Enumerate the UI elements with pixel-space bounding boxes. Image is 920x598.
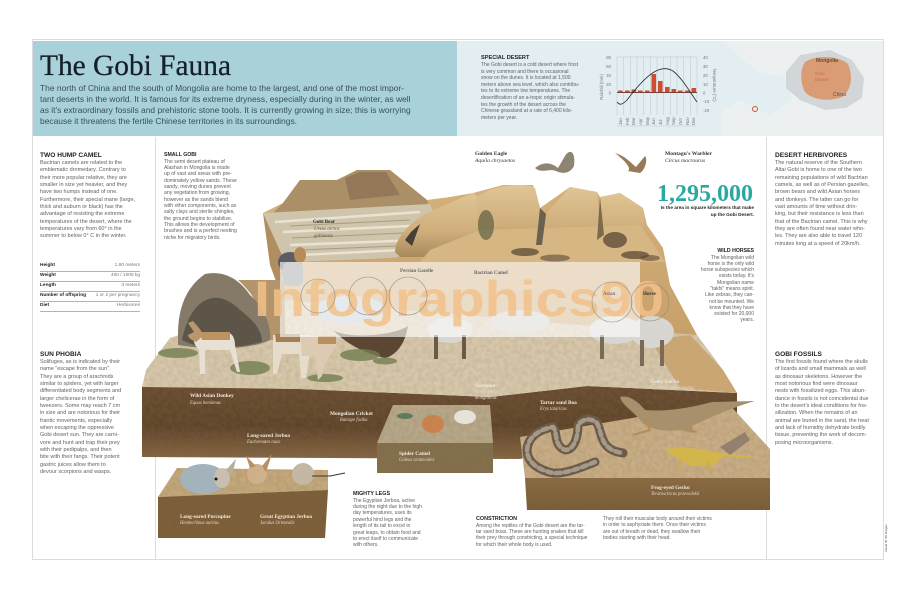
climate chart (599, 55, 717, 126)
body: constriction column 2 (603, 516, 712, 541)
body: sun phobia: with their pedipalps, and then (40, 447, 112, 453)
body: gobi fossils: most notorious find were dinosaur (775, 381, 858, 387)
body: constriction column 1: tar sand boas. These are hunting snakes that kill (476, 529, 583, 535)
intro text: because it threatens the fertile Chinese territories in its surroundings. (40, 116, 297, 126)
vegetation (158, 348, 397, 382)
animal labels (180, 379, 690, 520)
body: mighty legs: day temperatures, uses its (353, 510, 412, 516)
climate chart: Jun (651, 117, 656, 125)
great egyptian jerboa (292, 463, 345, 485)
body: small gobi: the ground begins to stabilize. (164, 216, 232, 222)
body: desert herbivores: camels, as well as of Persian gazelles, (775, 182, 869, 188)
row: height: 1.80 meters (115, 263, 140, 268)
body: wild horses: existed for 20,000 (714, 311, 754, 317)
body: two hump camel (40, 160, 135, 239)
animal labels: Wild Asian Donkey (190, 393, 234, 399)
animal labels: Goby Gecko (651, 379, 679, 385)
special desert heading: SPECIAL DESERT (481, 55, 529, 61)
special desert text: desertification of an a-tropic origin stimula- (481, 95, 575, 101)
heading: sun phobia: SUN PHOBIA (40, 351, 81, 358)
climate chart: Rainfall (mm) (599, 74, 604, 100)
header panel: introduction (33, 41, 457, 136)
climate chart: Nov (685, 117, 690, 125)
body: gobi fossils: of lizards and small mammals as well (775, 366, 866, 372)
body: mighty legs: length of its tail to excel in (353, 523, 410, 529)
row: diet: Herbivores (117, 303, 140, 308)
body: small gobi: up of vast and areas with pre- (164, 171, 232, 177)
montagu's warbler (615, 153, 646, 173)
body: mighty legs: The Egyptian Jerboa, active (353, 498, 415, 504)
body: small gobi: however as the sands blend (164, 197, 228, 203)
diorama illustration: Cyrtopodion elongatus (651, 386, 694, 391)
row: length: Length (40, 283, 56, 288)
climate chart: 20 (606, 82, 612, 87)
body: wild horses (701, 254, 754, 323)
locator map: Gobi (815, 71, 825, 76)
upper labels on the scene: Horse (643, 292, 657, 297)
body: small gobi: brushes and is a perfect nesting (164, 228, 237, 234)
label: montagu's warbler: Circus macrourus (665, 158, 705, 164)
label: golden eagle (474, 151, 515, 164)
body: wild horses: Mongolian name (717, 280, 754, 286)
body: gobi fossils: to the desert's ideal conditions for fos- (775, 403, 867, 409)
body: gobi fossils: animal are buried in the sand, the heat (775, 418, 869, 424)
long-eared jerboa (246, 454, 272, 484)
body: constriction column 1: Among the reptiles of the Gobi desert are the tar- (476, 522, 585, 528)
body: two hump camel: emblematic dromedary. Contrary to (40, 167, 126, 173)
body: two hump camel: temperatures of the desert, where the (40, 219, 132, 225)
body: wild horses: horse is the only wild (708, 261, 754, 267)
locator map (722, 41, 883, 136)
body: sun phobia: in size and are notorious for their (40, 410, 120, 416)
body: constriction column 1: their prey through constricting, a special technique (476, 535, 587, 541)
back rock formations (263, 170, 697, 370)
body: desert herbivores: king, but their resistance is less than (775, 211, 864, 217)
animal labels: Great Egyptian Jerboa (260, 514, 312, 520)
text block: constriction (476, 516, 712, 548)
body: two hump camel: thick and auburn or black) has the (40, 204, 123, 210)
big number: 1,295,000 (657, 181, 753, 207)
body: sun phobia: tweezers. Some may reach 7 cm (40, 403, 120, 409)
heading: small gobi: SMALL GOBI (164, 152, 196, 158)
body: two hump camel: Furthermore, their special mane (large, (40, 197, 135, 203)
diorama illustration: Hemiechinus auritus (179, 521, 219, 526)
body: desert herbivores: The natural reserve of the Southern (775, 160, 862, 166)
upper labels on the scene: Bactrian Camel (474, 271, 508, 276)
body: wild horses: exists today. It's (719, 273, 754, 279)
row: offspring (40, 291, 140, 302)
golden eagle (535, 152, 574, 173)
label: golden eagle: Golden Eagle (475, 151, 507, 157)
rodents block (158, 468, 328, 538)
row: length (40, 281, 140, 292)
heading: desert herbivores: DESERT HERBIVORES (775, 152, 847, 159)
text block: wild horses (701, 248, 754, 323)
row: height (40, 261, 140, 272)
body: desert herbivores: remaining populations of wild Bactrian (775, 175, 868, 181)
locator map: China (833, 92, 846, 98)
body: two hump camel: Bactrian camels are related to the (40, 160, 122, 166)
animal labels: Mongolian Cricket (330, 411, 373, 417)
upper labels on the scene (313, 220, 657, 297)
climate chart: Mar (631, 117, 636, 125)
heading: mighty legs: MIGHTY LEGS (353, 491, 390, 497)
body: desert herbivores: brown bears and wild Asian horses (775, 189, 860, 195)
climate chart: 20 (703, 73, 708, 78)
body: mighty legs (353, 498, 422, 548)
body: mighty legs: great leaps, to obtain food and (353, 530, 421, 536)
text block: desert herbivores (775, 152, 869, 247)
animal labels: Long-eared Jerboa (247, 433, 290, 439)
rainfall bars (618, 74, 696, 92)
locator map: Mongolia (816, 58, 838, 64)
white horses and camels (314, 296, 674, 366)
climate chart: 40 (703, 55, 708, 60)
special desert text: tes to its extreme low temperatures. The (481, 88, 570, 94)
row: length: 3 meters (121, 283, 140, 288)
body: small gobi (164, 158, 237, 241)
climate chart: Aug (665, 117, 670, 125)
body: sun phobia: vore and hunt and trap their prey (40, 440, 120, 446)
special desert text: tes the growth of the desert across the (481, 102, 566, 108)
special desert text: The Gobi desert is a cold desert where frost (481, 62, 578, 68)
climate chart: Jan (618, 117, 623, 125)
special desert text: meters per year. (481, 115, 517, 121)
row: offspring: Number of offspring (40, 293, 86, 298)
body: desert herbivores: that of the Bactrian camel. This is why (775, 219, 868, 225)
special desert text: meters above sea level, which also contribu- (481, 82, 579, 88)
diorama illustration: Teratoscincus przewalskii (651, 492, 700, 497)
body: wild horses: The Mongolian wild (711, 254, 754, 260)
climate chart: Sep (671, 117, 676, 125)
body: gobi fossils: tissue, preventing the work of decom- (775, 432, 866, 438)
upper labels on the scene: Gobi Bear (313, 220, 336, 225)
body: small gobi: salty clays and sterile shingles, (164, 209, 235, 215)
watermark: Infographics90 (254, 271, 664, 327)
intro text: The north of China and the south of Mongolia are home to the largest, and one of the most impor- (40, 83, 404, 93)
body: wild horses: horse subspecies which (701, 267, 754, 273)
diorama illustration: mongolicus (475, 396, 497, 401)
big number caption (661, 205, 754, 217)
climate chart: Feb (625, 117, 630, 125)
body: wild horses: know that they have (710, 305, 754, 311)
body: desert herbivores: les. They are also able to travel 120 (775, 233, 862, 239)
locator map: Desert (815, 77, 829, 82)
animal labels: Long-eared Porcupine (180, 514, 231, 520)
body: sun phobia: name "escape from the sun". (40, 366, 111, 372)
special desert text: is very common and there is occasional (481, 69, 569, 75)
boa and gecko block (520, 402, 770, 510)
body: gobi fossils (775, 359, 869, 446)
climate chart: 60 (606, 64, 612, 69)
body: desert herbivores: and donkeys. The latter can go for (775, 197, 858, 203)
tartar geckos (620, 396, 770, 472)
text block: two hump camel (40, 152, 135, 239)
diorama illustration: Bataspe fasika (340, 418, 368, 423)
upper labels on the scene: Persian Gazelle (400, 269, 434, 274)
row: weight: 400 / 1000 kg (111, 273, 140, 278)
body: gobi fossils: The first fossils found where the skulls (775, 359, 868, 365)
body: gobi fossils: posing microorganisms. (775, 440, 833, 446)
body: sun phobia: bite with their fangs. Their potent (40, 454, 120, 460)
body: wild horses: Like zebras, they can- (705, 292, 754, 298)
climate chart: Temperature (°C) (712, 68, 717, 102)
body: gobi fossils: dance in fossils is not coincidental due (775, 396, 869, 402)
special desert text: snow on the dunes. It is located at 1,500 (481, 75, 571, 81)
body: small gobi: any vegetation from growing, (164, 190, 230, 196)
body: two hump camel: have two humps instead of one. (40, 189, 118, 195)
climate chart: Oct (678, 118, 683, 125)
body: sun phobia: similar to spiders, yet with larger (40, 381, 119, 387)
body: sun phobia: They are a group of arachnids (40, 374, 113, 380)
intro text: as it's extraordinary fossils and prehistoric stone tools. It is currently growing in size; this is worrying (40, 105, 411, 115)
body: gobi fossils: nests with fossilized eggs. This abun- (775, 388, 866, 394)
heading: gobi fossils: GOBI FOSSILS (775, 351, 822, 358)
body: sun phobia: gastric juices allow them to (40, 462, 106, 468)
body: small gobi: with other components, such as (164, 203, 236, 209)
body: two hump camel: temperatures vary from 60° in the (40, 226, 122, 232)
big number caption: up the Gobi Desert. (711, 212, 754, 216)
main soil layer (142, 386, 737, 459)
body: wild horses: years. (740, 317, 754, 323)
body: sun phobia (40, 359, 121, 475)
body: gobi fossils: as dinosaur skeletons. However the (775, 374, 862, 380)
body: desert herbivores: Altai Gobi is home to one of the two (775, 167, 862, 173)
animal labels: Tartar sand Boa (540, 400, 577, 406)
heading: constriction: CONSTRICTION (476, 516, 517, 522)
intro text (40, 83, 411, 126)
heading: two hump camel: TWO HUMP CAMEL (40, 152, 102, 159)
body: mighty legs: to erect itself to communicate (353, 536, 418, 542)
body: desert herbivores (775, 160, 869, 247)
body: mighty legs: during the night due to the high (353, 504, 422, 510)
camel data table (40, 262, 140, 312)
climate chart: May (645, 116, 650, 125)
grey boulder (178, 273, 408, 358)
climate chart: Apr (638, 118, 643, 125)
climate chart: -20 (703, 108, 710, 113)
body: wild horses: "takhi" means spirit. (710, 286, 754, 292)
title: The Gobi Fauna (40, 50, 231, 82)
big number caption: Is the area in square kilometers that make (661, 205, 754, 210)
text block: gobi fossils (775, 351, 869, 446)
body: small gobi: dominately yellow sands. These (164, 178, 237, 184)
temperature line (617, 69, 697, 104)
animal labels: Spider Camel (399, 451, 430, 457)
special desert text: Chinese grassland at a rate of 6,400 kilo- (481, 108, 572, 114)
row: weight (40, 271, 140, 282)
climate chart: 10 (703, 82, 708, 87)
body: constriction column 2: They roll their muscular body around their victims (603, 516, 712, 522)
body: mighty legs: with others. (353, 542, 379, 548)
row: diet: Diet (40, 303, 49, 308)
body: sun phobia: Solifuges, as is indicated by their (40, 359, 120, 365)
body: two hump camel: advantage of resisting the extreme (40, 211, 124, 217)
body: constriction column 1: for which their whole body is used. (476, 542, 552, 548)
body: sun phobia: Gobi desert sun. They are carni- (40, 432, 119, 438)
climate chart: Dec (691, 117, 696, 125)
label: golden eagle: Aquila chrysaetos (475, 158, 515, 164)
scorpion and spider block (377, 405, 493, 473)
body: mighty legs: powerful hind legs and the (353, 517, 411, 523)
body: sun phobia: frantic movements, especially (40, 418, 112, 424)
body: constriction column 2: are out of breath or dead, they swallow their (603, 529, 700, 535)
body: constriction column 2: bodies starting with their head. (603, 535, 671, 541)
row: diet (40, 301, 140, 312)
body: desert herbivores: minutes long at a speed of 20km/h. (775, 241, 861, 247)
upper labels on the scene: Asian (603, 292, 615, 297)
body: desert herbivores: vast amounts of time without drin- (775, 204, 857, 210)
long-eared hedgehog (180, 459, 236, 494)
body: desert herbivores: they are often found near water who- (775, 226, 865, 232)
heading: wild horses: WILD HORSES (717, 248, 754, 254)
climate chart: 0 (703, 90, 706, 96)
body: sun phobia: when escaping the oppressive (40, 425, 114, 431)
watermark (254, 262, 669, 337)
text block: sun phobia (40, 351, 121, 475)
climate chart: -10 (703, 99, 710, 104)
body: two hump camel: smaller in size yet heavier, and they (40, 182, 127, 188)
body: wild horses: not be mounted. We (709, 299, 754, 305)
diorama illustration: Eryx tataricus (539, 407, 567, 412)
body: constriction column 1 (476, 522, 588, 548)
upper labels on the scene: Ursus arctos (314, 227, 340, 232)
body: sun phobia: devour scorpions and wasps. (40, 469, 111, 475)
body: constriction column 2: in order to asphyxiate them. Once their victims (603, 522, 706, 528)
diorama illustration: Equus hemionus (189, 401, 221, 406)
row: weight: Weight (40, 273, 56, 278)
climate chart: 30 (703, 64, 708, 69)
body: sun phobia: differentiated body segments and (40, 388, 121, 394)
row: height: Height (40, 263, 55, 268)
body: sun phobia: larger chelicerae in the form of (40, 396, 114, 402)
wild asian donkeys (188, 321, 336, 380)
climate chart: 40 (606, 73, 612, 78)
image credit: Visual ID: 80 Images (884, 524, 888, 552)
climate chart: 80 (606, 55, 612, 60)
label: montagu's warbler: Montagu's Warbler (665, 151, 712, 157)
climate chart: 0 (609, 90, 612, 96)
animal labels: Frog-eyed Gecko (651, 485, 690, 491)
ground surface (142, 300, 737, 397)
body: gobi fossils: and lack of humidity dehydrate bodily (775, 425, 866, 431)
diorama illustration: Galeus araneoides (399, 458, 434, 463)
intro text: tant deserts in the world. It is famous for its extreme dryness, especially during in the winter, as well (40, 94, 410, 104)
body: small gobi: niche for migratory birds. (164, 235, 221, 241)
diorama illustration: Euchoreutes naso (246, 440, 281, 445)
diorama illustration: Mesobuthus (474, 390, 498, 395)
text block: small gobi (164, 152, 237, 241)
body: two hump camel: their more popular relative, they are (40, 175, 127, 181)
upper labels on the scene: gobiensis (314, 234, 333, 239)
label: montagu's warbler (665, 151, 712, 164)
body: gobi fossils: silization. When the remains of an (775, 410, 858, 416)
body: small gobi: This allows the development of (164, 222, 235, 228)
bear (278, 247, 306, 286)
body: small gobi: sandy, moving dunes prevent (164, 184, 231, 190)
tartar sand boa (527, 419, 623, 473)
body: small gobi: Alashan in Mongolia is made (164, 165, 230, 171)
text block: mighty legs (353, 491, 422, 548)
diorama illustration: Jaculus Orientalis (260, 521, 295, 526)
body: two hump camel: summer to below 0° C in the winter. (40, 233, 127, 239)
header panel: special desert (457, 41, 883, 136)
row: offspring: 1 or 2 per pregnancy (96, 293, 140, 298)
climate chart: Jul (658, 119, 663, 125)
special desert text (481, 62, 580, 121)
animal labels: Scorpion (475, 383, 495, 389)
body: small gobi: The semi desert plateau of (164, 158, 225, 164)
